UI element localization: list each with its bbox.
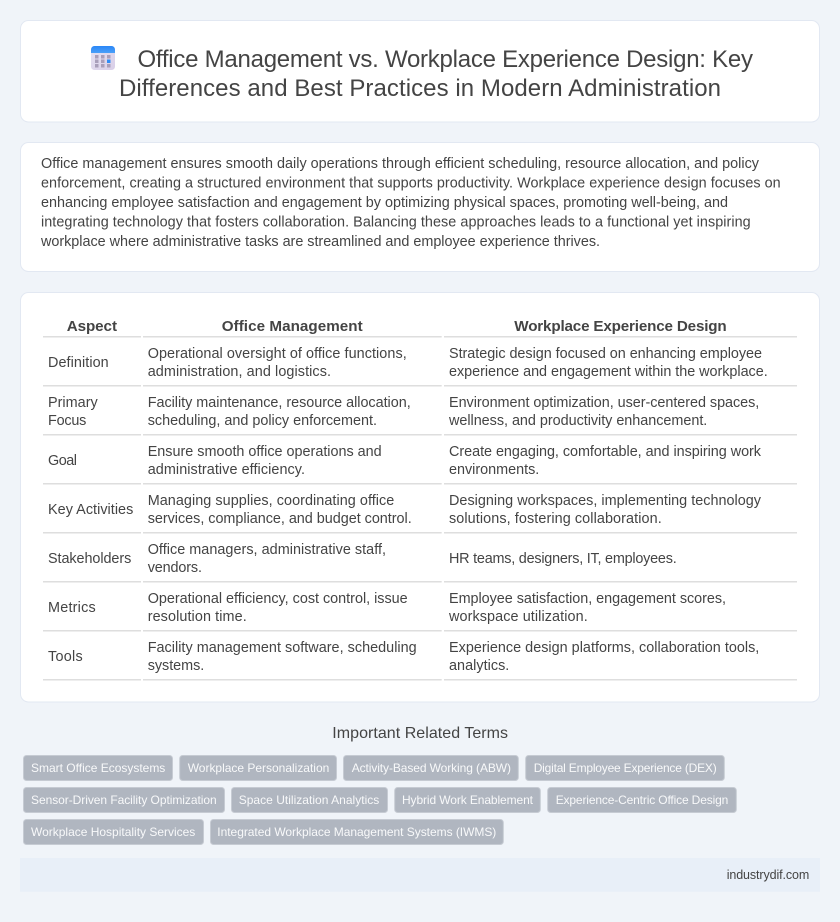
panel: header <box>20 20 820 122</box>
table row: Tools: systems. <box>148 658 204 674</box>
tag: Integrated Workplace Management Systems (IWMS): Integrated Workplace Management Systems (IWMS) <box>217 825 496 839</box>
table row: Goal: Ensure smooth office operations and <box>148 444 382 460</box>
tag: Activity-Based Working (ABW) <box>344 756 518 780</box>
table row: Key Activities: solutions, fostering collaboration. <box>449 511 662 527</box>
table row: Tools: analytics. <box>449 658 509 674</box>
title: Differences and Best Practices in Modern Administration <box>119 75 721 102</box>
table row: Primary Focus: wellness, and productivity enhancement. <box>448 413 707 429</box>
table row: Stakeholders: Stakeholders <box>48 551 131 567</box>
tag: Sensor-Driven Facility Optimization: Sensor-Driven Facility Optimization <box>31 793 217 807</box>
table row: Definition: Strategic design focused on enhancing employee <box>449 346 762 362</box>
tag: Activity-Based Working (ABW): Activity-Based Working (ABW) <box>352 761 511 775</box>
table row: Definition: Operational oversight of office functions, <box>148 346 407 362</box>
table row: Tools: Facility management software, scheduling <box>148 640 417 656</box>
table row: Goal: environments. <box>449 462 539 478</box>
table row: Definition: experience and engagement within the workplace. <box>449 364 768 380</box>
table row: Metrics: workspace utilization. <box>448 609 588 625</box>
tag: Space Utilization Analytics <box>232 788 388 812</box>
table row: Key Activities: Managing supplies, coordinating office <box>148 493 394 509</box>
table row: Stakeholders <box>43 542 797 582</box>
table row: Metrics: Metrics <box>48 600 96 616</box>
tag: Workplace Hospitality Services <box>24 820 204 844</box>
table row: Key Activities: Designing workspaces, implementing technology <box>449 493 762 509</box>
table header row: Office Management <box>222 318 363 335</box>
table row: Goal: administrative efficiency. <box>148 462 305 478</box>
table row: Tools: Tools <box>48 649 83 665</box>
text block: introduction paragraph: enforcement, creating a structured environment that supports productivity. Workplace experience design focuses on <box>41 176 781 192</box>
text block: introduction paragraph: workplace where administrative tasks are streamlined and employee experience thrives. <box>40 234 600 250</box>
text block: introduction paragraph: integrating technology that fosters collaboration. Balancing these approaches leads to a functional yet inspiring <box>41 214 751 230</box>
table row: Primary Focus: Environment optimization, user-centered spaces, <box>449 395 759 411</box>
tag: Digital Employee Experience (DEX): Digital Employee Experience (DEX) <box>534 761 717 775</box>
title: Office Management vs. Workplace Experience Design: Key <box>138 46 753 73</box>
table row: Definition: administration, and logistics. <box>148 364 331 380</box>
tag: Integrated Workplace Management Systems (IWMS) <box>210 820 503 844</box>
tag: Smart Office Ecosystems: Smart Office Ecosystems <box>31 761 165 775</box>
table row: Definition <box>43 346 797 386</box>
table row: Tools <box>43 640 797 680</box>
table row: Metrics: Employee satisfaction, engagement scores, <box>449 591 726 607</box>
table header row <box>43 318 797 338</box>
table row: Stakeholders: HR teams, designers, IT, employees. <box>449 551 677 567</box>
table row: Goal <box>43 444 797 484</box>
table row: Key Activities: Key Activities <box>48 502 133 518</box>
tag: Smart Office Ecosystems <box>24 756 172 780</box>
tag: Digital Employee Experience (DEX) <box>526 756 724 780</box>
title <box>119 46 753 102</box>
tag: Sensor-Driven Facility Optimization <box>24 788 224 812</box>
table row: Primary Focus <box>43 395 797 436</box>
table row: Goal: Goal <box>48 453 77 469</box>
text block: introduction paragraph <box>40 156 781 250</box>
table row: Definition: Definition <box>48 355 109 371</box>
table row: Stakeholders: vendors. <box>148 560 202 576</box>
table row: Primary Focus: Facility maintenance, resource allocation, <box>148 395 411 411</box>
table header row: Aspect <box>67 318 117 335</box>
tag: Experience-Centric Office Design: Experience-Centric Office Design <box>556 793 728 807</box>
heading: Important Related Terms: Important Related Terms <box>332 725 508 742</box>
table row: Key Activities <box>43 493 797 534</box>
table row: Primary Focus: Focus <box>48 413 86 429</box>
table row: Stakeholders: Office managers, administrative staff, <box>148 542 386 558</box>
text block: introduction paragraph: Office management ensures smooth daily operations through efficient scheduling, resource allocation, and policy <box>41 156 760 172</box>
table row: Primary Focus: scheduling, and policy enforcement. <box>148 413 377 429</box>
tag: Workplace Personalization <box>180 756 336 780</box>
table row: Key Activities: services, compliance, and budget control. <box>148 511 412 527</box>
panel: introduction <box>20 142 820 272</box>
tag: Hybrid Work Enablement: Hybrid Work Enablement <box>402 793 534 807</box>
panel: comparison table <box>20 292 820 702</box>
table row: Primary Focus: Primary <box>48 395 98 411</box>
text block: introduction paragraph: enhancing employee satisfaction and engagement by optimizing physical spaces, promoting well-being, and <box>41 195 728 211</box>
tag: Hybrid Work Enablement <box>395 788 540 812</box>
icon: calendar <box>91 46 115 70</box>
table row: Goal: Create engaging, comfortable, and inspiring work <box>449 444 762 460</box>
table row: Tools: Experience design platforms, collaboration tools, <box>449 640 759 656</box>
table row: Metrics: resolution time. <box>148 609 247 625</box>
table row: Metrics: Operational efficiency, cost control, issue <box>148 591 408 607</box>
footer source text: industrydif.com <box>727 868 809 882</box>
footer <box>20 858 820 892</box>
tag: Workplace Personalization: Workplace Personalization <box>188 761 329 775</box>
tag: Space Utilization Analytics: Space Utilization Analytics <box>239 793 379 807</box>
table row: Metrics <box>43 591 797 632</box>
tag: Experience-Centric Office Design <box>548 788 736 812</box>
table header row: Workplace Experience Design <box>514 318 727 335</box>
panel: related term tags <box>24 756 736 844</box>
tag: Workplace Hospitality Services: Workplace Hospitality Services <box>31 825 195 839</box>
